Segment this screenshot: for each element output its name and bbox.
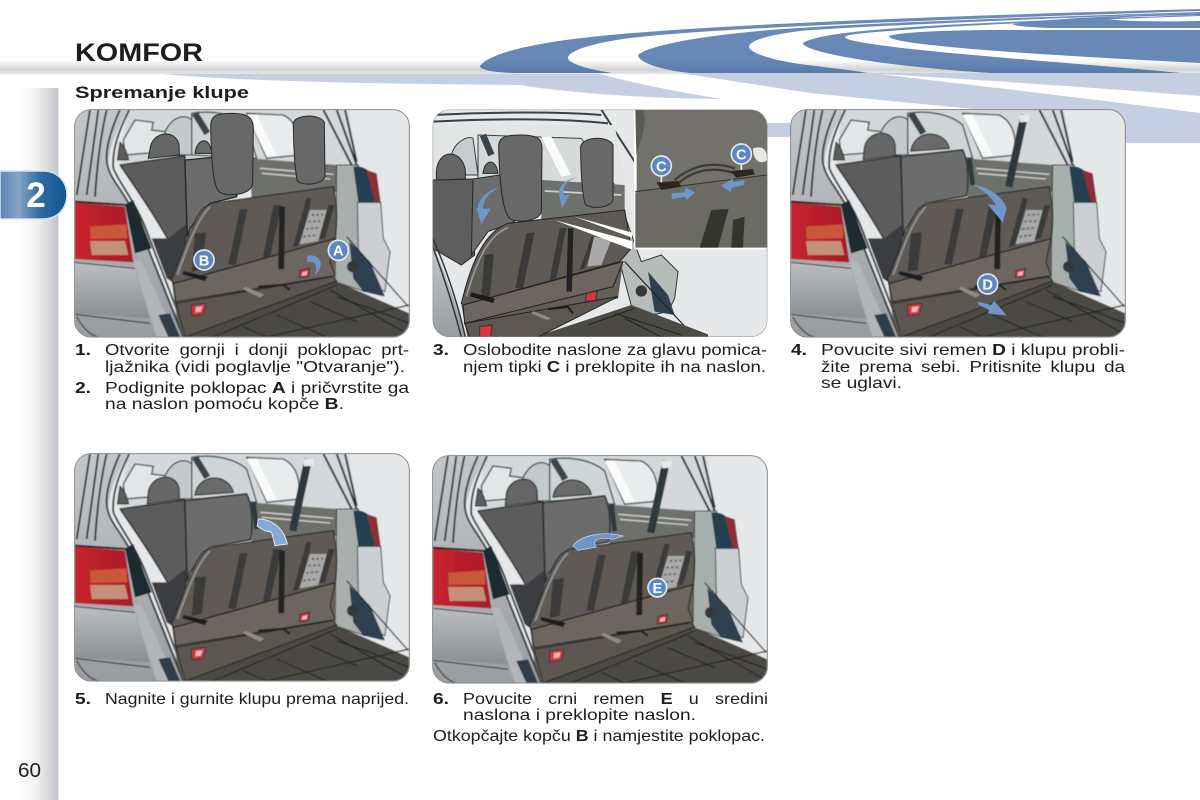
arrow: lid xyxy=(307,255,321,275)
title: KOMFOR xyxy=(75,39,203,67)
header band xyxy=(0,60,1200,74)
steps 1 and 2: 1. xyxy=(75,342,91,359)
arrow: tilt xyxy=(257,519,287,546)
step 4: 4. xyxy=(791,342,807,359)
marker A xyxy=(328,240,348,260)
step 6: 6. xyxy=(433,691,449,708)
steps 1 and 2: na naslon pomoću kopče B. xyxy=(105,396,344,413)
steps 1 and 2: Podignite poklopac A i pričvrstite ga xyxy=(105,380,409,397)
illustration 2: headrest buttons with inset xyxy=(433,110,769,337)
step 4 xyxy=(791,342,1125,392)
marker A: A xyxy=(333,244,344,260)
swoosh decoration xyxy=(163,9,1200,143)
marker C right: C xyxy=(736,147,747,163)
step 4: se uglavi. xyxy=(821,375,902,392)
marker B xyxy=(194,250,214,270)
step 6: naslona i preklopite naslon. xyxy=(463,707,696,724)
illustration 1: lid and clip xyxy=(75,110,409,338)
illustration 5: tilt bench xyxy=(75,454,409,682)
marker D: D xyxy=(982,277,993,293)
leader wedge xyxy=(555,217,632,250)
inset detail xyxy=(635,110,769,248)
steps 1 and 2: 2. xyxy=(75,380,91,397)
step 5: Nagnite i gurnite klupu prema naprijed. xyxy=(105,691,409,708)
marker E: E xyxy=(652,581,662,597)
step 3: njem tipki C i preklopite ih na naslon. xyxy=(463,359,766,376)
chapter tab xyxy=(0,171,67,219)
headrest right xyxy=(581,138,613,207)
chapter tab: 2 xyxy=(26,176,46,215)
illustration 6: fold backrest with strap E xyxy=(433,456,767,684)
step 4: žite prema sebi. Pritisnite klupu da xyxy=(821,359,1125,376)
arrow: button right xyxy=(671,188,695,200)
headrest left xyxy=(499,135,542,221)
headrest left xyxy=(211,113,253,195)
left sidebar xyxy=(20,88,58,800)
marker E xyxy=(646,578,667,597)
arrow: bench forward xyxy=(973,185,1007,222)
headrest right xyxy=(293,116,325,184)
step 3: 3. xyxy=(433,342,449,359)
marker C left: C xyxy=(656,159,667,175)
marker D xyxy=(978,274,998,294)
marker B: B xyxy=(199,253,209,269)
illustration 3: pull strap D xyxy=(791,110,1125,338)
arrow: fold backrest xyxy=(573,534,623,550)
arrow: button left xyxy=(721,178,745,192)
step 6 xyxy=(433,691,768,745)
step 3: Oslobodite naslone za glavu pomica- xyxy=(463,342,767,359)
steps 1 and 2: Otvorite gornji i donji poklopac prt- xyxy=(105,342,409,359)
step 4: Povucite sivi remen D i klupu probli- xyxy=(821,342,1125,359)
arrow: strap pull xyxy=(978,301,1007,316)
step 5: 5. xyxy=(75,691,91,708)
step 3 xyxy=(433,342,767,376)
step 6: Povucite crni remen E u sredini xyxy=(463,691,768,708)
step 6: Otkopčajte kopču B i namjestite poklopac. xyxy=(433,728,765,745)
steps 1 and 2: ljažnika (vidi poglavlje "Otvaranje"). xyxy=(105,359,405,376)
steps 1 and 2 xyxy=(75,342,409,413)
arrow: headrest left xyxy=(476,188,500,224)
section heading: Spremanje klupe xyxy=(75,83,249,102)
page number: 60 xyxy=(18,760,41,782)
arrow: headrest right xyxy=(559,178,576,209)
